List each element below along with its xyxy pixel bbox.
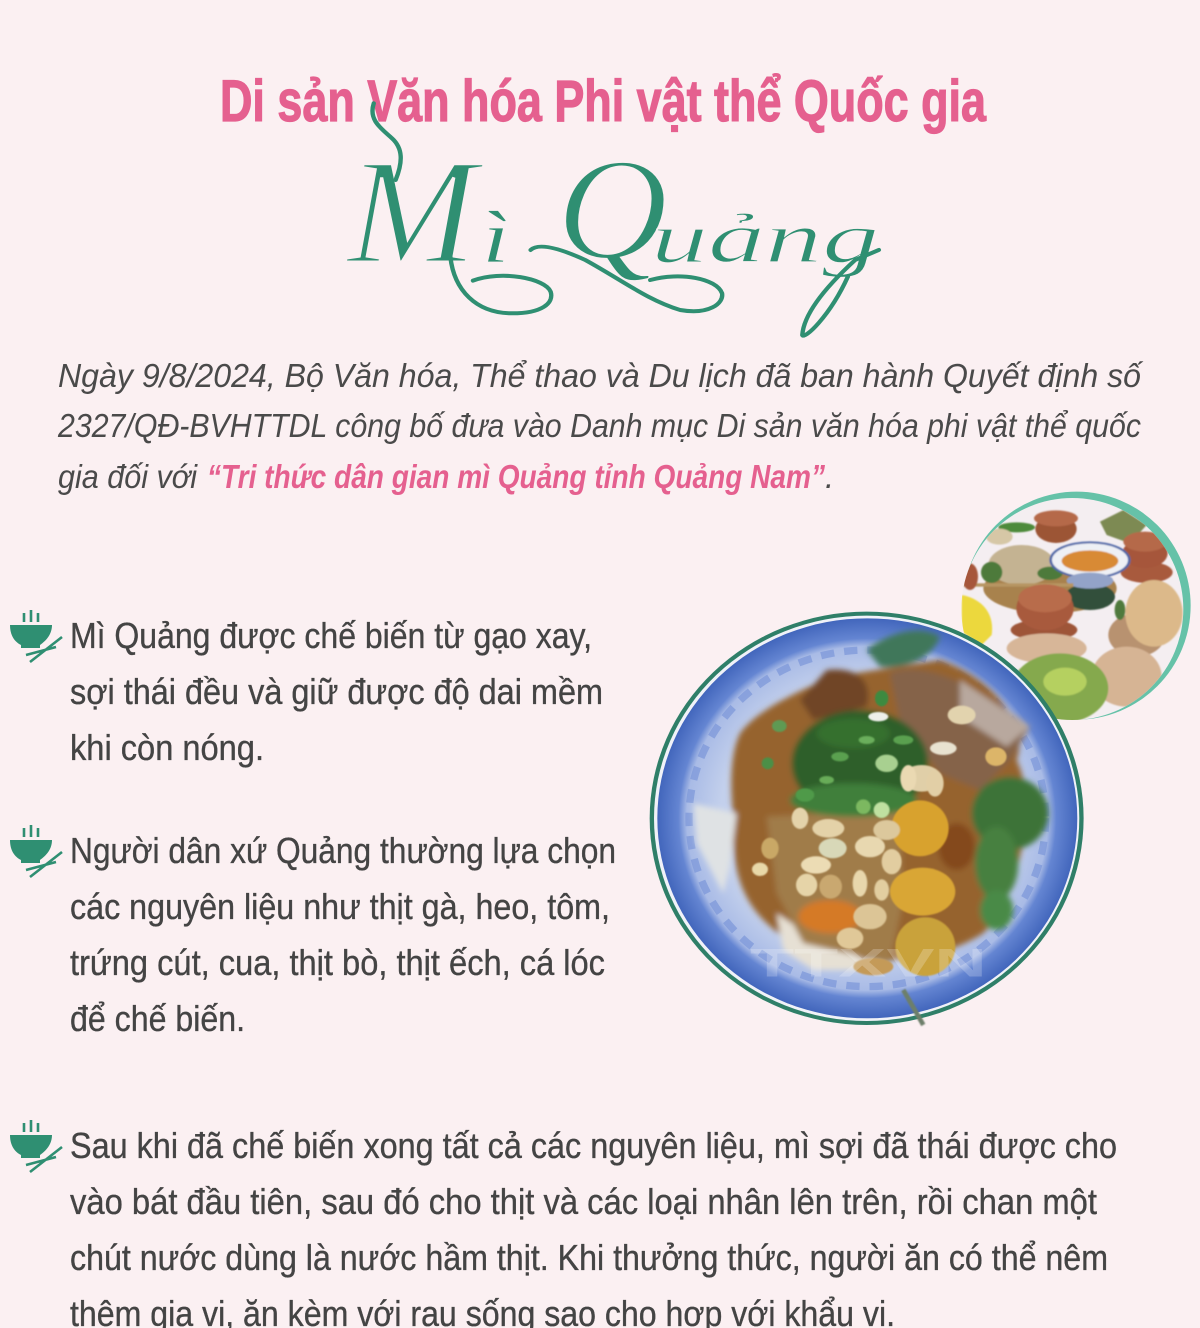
intro paragraph: Ngày 9/8/2024, Bộ Văn hóa, Thể thao và Du lịch đã ban hành Quyết định số (58, 357, 1144, 394)
bullet 1: sợi thái đều và giữ được độ dai mềm (70, 671, 603, 712)
script title: Mì Quảng: ì (482, 197, 510, 279)
script title: Mì Quảng: M (345, 129, 484, 295)
icon: noodle bowl with chopsticks (10, 1120, 62, 1172)
bullet 1: khi còn nóng. (70, 727, 264, 768)
bullet 2: để chế biến. (70, 998, 245, 1039)
heading: national intangible heritage: Di sản Văn hóa Phi vật thể Quốc gia (220, 69, 987, 134)
bullet 2 (10, 825, 616, 1039)
bullet 3: chút nước dùng là nước hầm thịt. Khi thưởng thức, người ăn có thể nêm (70, 1237, 1108, 1278)
intro paragraph: “Tri thức dân gian mì Quảng tỉnh Quảng Nam” (207, 458, 825, 495)
photo: bowl of Mi Quang: TTXVN (750, 942, 987, 986)
bullet 3: Sau khi đã chế biến xong tất cả các nguyên liệu, mì sợi đã thái được cho (70, 1125, 1117, 1166)
script title: Mì Quảng (345, 103, 879, 336)
bullet 1 (10, 610, 603, 768)
photo: bowl of Mi Quang (650, 612, 1084, 1025)
bullet 3: vào bát đầu tiên, sau đó cho thịt và các loại nhân lên trên, rồi chan một (70, 1181, 1097, 1222)
bullet 2: trứng cút, cua, thịt bò, thịt ếch, cá lóc (70, 942, 605, 983)
script title: Mì Quảng: uảng (651, 198, 879, 278)
photo: table of Mi Quang dishes in circle (961, 492, 1191, 720)
bullet 3 (10, 1120, 1117, 1328)
icon: noodle bowl with chopsticks (10, 610, 62, 662)
bullet 2: Người dân xứ Quảng thường lựa chọn (70, 830, 616, 871)
bullet 2: các nguyên liệu như thịt gà, heo, tôm, (70, 886, 610, 927)
intro paragraph: gia đối với (58, 458, 199, 495)
bullet 1: Mì Quảng được chế biến từ gạo xay, (70, 615, 592, 656)
intro paragraph: . (825, 458, 834, 495)
icon: noodle bowl with chopsticks (10, 825, 62, 877)
script title: Mì Quảng: Q (556, 128, 668, 290)
intro paragraph (57, 357, 1144, 495)
